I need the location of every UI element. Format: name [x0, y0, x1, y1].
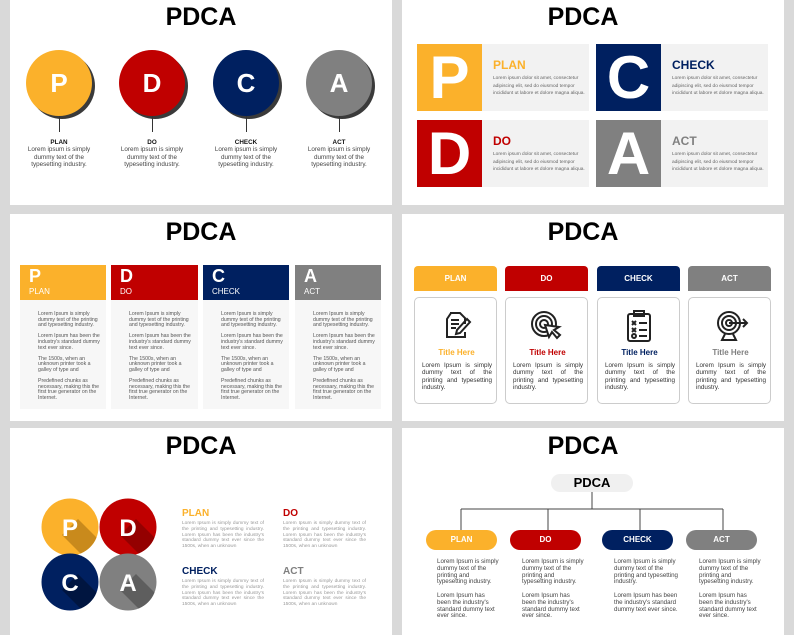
block: ACT: A — [607, 120, 650, 187]
block: CHECK: Lorem ipsum dolor sit amet, consectetur adipiscing elit, sed do eiusmod tempor incididunt ut labore et dolore magna aliqua. — [672, 76, 764, 96]
card: PLAN: PLAN — [445, 274, 466, 283]
text: DO: Lorem Ipsum is simply dummy text of the printing and typesetting industry. Lorem Ipsum has been the industry's standard dummy text ever since the 1500s, when an unknown — [283, 521, 366, 549]
card: CHECK — [597, 266, 680, 404]
text: CHECK: CHECK — [182, 566, 218, 577]
card: ACT: Lorem Ipsum is simply dummy text of the printing and typesetting industry. — [696, 362, 766, 391]
block: ACT: ACT — [672, 134, 697, 148]
node: CHECK — [602, 530, 673, 550]
node: ACT — [686, 530, 757, 550]
column: PLAN: P — [29, 266, 41, 286]
block: CHECK: C — [607, 44, 650, 111]
text: ACT: Lorem Ipsum has been the industry's standard dummy text ever since. — [699, 592, 757, 619]
card: DO: DO — [540, 274, 552, 283]
circle: P — [26, 50, 95, 132]
text: DO — [522, 558, 584, 619]
column: CHECK: CHECK — [212, 287, 240, 296]
column: DO: D — [120, 266, 133, 286]
column: ACT: Lorem Ipsum has been the industry's standard dummy text ever since. — [313, 333, 375, 351]
text: ACT: Lorem Ipsum is simply dummy text of the printing and typesetting industry. — [699, 558, 761, 585]
column: PLAN: The 1500s, when an unknown printer took a galley of type and — [38, 356, 90, 373]
node: ACT: ACT — [713, 535, 730, 544]
circle: D — [119, 50, 188, 132]
text: PLAN: PLAN — [182, 508, 209, 519]
column: CHECK — [203, 265, 289, 409]
text: CHECK: Lorem Ipsum is simply dummy text of the printing and typesetting industry. Lorem Ipsum has been the industry's standard dummy text ever since the 1500s, when an unknown — [182, 579, 264, 607]
panel: slide 5 circle cluster — [10, 428, 392, 635]
circle: P: P — [50, 68, 68, 98]
root node: PDCA — [574, 475, 610, 490]
text: CHECK: CHECK — [235, 139, 257, 146]
column: ACT: Predefined chunks as necessary, making this the first true generator on the Internet. — [313, 378, 374, 401]
text: CHECK — [614, 558, 678, 613]
circle: A: A — [330, 68, 348, 98]
column: DO: The 1500s, when an unknown printer took a galley of type and — [129, 356, 181, 373]
card: PLAN — [414, 266, 497, 404]
text: PLAN — [182, 508, 264, 549]
icon: clipboard checklist — [627, 310, 651, 342]
column: DO: DO — [120, 287, 132, 296]
title: PDCA — [548, 3, 618, 31]
title: PDCA — [548, 432, 618, 460]
block: ACT — [596, 120, 768, 187]
block: DO — [417, 120, 589, 187]
text: ACT: Lorem Ipsum is simply dummy text of the printing and typesetting industry. Lorem Ipsum has been the industry's standard dummy text ever since the 1500s, when an unknown — [283, 579, 366, 607]
block: DO: Lorem ipsum dolor sit amet, consectetur adipiscing elit, sed do eiusmod tempor incididunt ut labore et dolore magna aliqua. — [493, 152, 585, 172]
block: DO: D — [428, 120, 471, 187]
circle: C: C — [237, 68, 255, 98]
text: ACT — [699, 558, 761, 619]
block: PLAN: P — [429, 44, 470, 111]
title: PDCA — [548, 218, 618, 246]
text: ACT: Lorem ipsum is simply dummy text of the typesetting industry. — [308, 146, 370, 168]
column: PLAN: Lorem Ipsum has been the industry's standard dummy text ever since. — [38, 333, 100, 351]
column: PLAN: Predefined chunks as necessary, making this the first true generator on the Internet. — [38, 378, 99, 401]
icon: document with pen — [446, 312, 472, 338]
text: PLAN: Lorem Ipsum has been the industry's standard dummy text ever since. — [437, 592, 495, 619]
text: CHECK — [182, 566, 264, 607]
card: PLAN: Lorem Ipsum is simply dummy text of the printing and typesetting industry. — [422, 362, 492, 391]
node: PLAN: PLAN — [451, 535, 472, 544]
text: PLAN — [437, 558, 499, 619]
icon: target with cursor — [531, 311, 562, 340]
column: ACT: ACT — [304, 287, 320, 296]
card: DO: Lorem Ipsum is simply dummy text of the printing and typesetting industry. — [513, 362, 583, 391]
block: PLAN: PLAN — [493, 58, 526, 72]
column: CHECK: The 1500s, when an unknown printer took a galley of type and — [221, 356, 273, 373]
text: DO — [283, 508, 366, 549]
circle cluster: A — [119, 570, 137, 597]
text: CHECK: Lorem Ipsum has been the industry's standard dummy text ever since. — [614, 592, 678, 613]
node: DO — [510, 530, 581, 550]
column: CHECK: Lorem Ipsum is simply dummy text of the printing and typesetting industry. — [221, 311, 281, 328]
circle: A — [306, 50, 375, 132]
text: ACT: ACT — [333, 139, 345, 146]
panel: slide 1 circles — [10, 0, 392, 205]
column: ACT — [295, 265, 381, 409]
card: CHECK: CHECK — [624, 274, 653, 283]
text: PLAN: Lorem ipsum is simply dummy text of the typesetting industry. — [28, 146, 90, 168]
panel: slide 6 org chart — [402, 428, 784, 635]
card: CHECK: Lorem Ipsum is simply dummy text of the printing and typesetting industry. — [605, 362, 675, 391]
title: PDCA — [166, 432, 236, 460]
text: PLAN: Lorem Ipsum is simply dummy text of the printing and typesetting industry. Lorem Ipsum has been the industry's standard dummy text ever since the 1500s, when an unknown — [182, 521, 264, 549]
text: PLAN: Lorem Ipsum is simply dummy text of the printing and typesetting industry. — [437, 558, 499, 585]
text: CHECK: Lorem ipsum is simply dummy text of the typesetting industry. — [215, 146, 277, 168]
card: DO: Title Here — [529, 348, 566, 357]
card: ACT: Title Here — [712, 348, 749, 357]
card: CHECK: Title Here — [621, 348, 658, 357]
title: PDCA — [166, 218, 236, 246]
block: PLAN — [417, 44, 589, 111]
circle: D: D — [143, 68, 161, 98]
root node — [551, 474, 633, 492]
column: ACT: Lorem Ipsum is simply dummy text of the printing and typesetting industry. — [313, 311, 373, 328]
column: PLAN — [20, 265, 106, 409]
column: CHECK: Lorem Ipsum has been the industry's standard dummy text ever since. — [221, 333, 283, 351]
text: DO: DO — [147, 139, 157, 146]
block: CHECK — [596, 44, 768, 111]
text: DO: Lorem ipsum is simply dummy text of the typesetting industry. — [121, 146, 183, 168]
column: DO: Predefined chunks as necessary, making this the first true generator on the Internet. — [129, 378, 190, 401]
node: DO: DO — [540, 535, 552, 544]
text: ACT — [283, 566, 366, 607]
column: PLAN: PLAN — [29, 287, 50, 296]
block: DO: DO — [493, 134, 511, 148]
column: DO: Lorem Ipsum has been the industry's standard dummy text ever since. — [129, 333, 191, 351]
column: DO: Lorem Ipsum is simply dummy text of the printing and typesetting industry. — [129, 311, 189, 328]
connector lines — [460, 492, 724, 530]
node: PLAN — [426, 530, 497, 550]
circle: C — [213, 50, 282, 132]
column: CHECK: Predefined chunks as necessary, making this the first true generator on the Internet. — [221, 378, 282, 401]
text: DO: Lorem Ipsum has been the industry's standard dummy text ever since. — [522, 592, 580, 619]
icon: target with arrow on stand — [717, 311, 748, 341]
title: PDCA — [166, 3, 236, 31]
panel: slide 3 columns — [10, 214, 392, 421]
block: ACT: Lorem ipsum dolor sit amet, consectetur adipiscing elit, sed do eiusmod tempor incididunt ut labore et dolore magna aliqua. — [672, 152, 764, 172]
card: ACT: ACT — [721, 274, 738, 283]
panel: slide 2 squares — [402, 0, 784, 205]
column: DO — [111, 265, 198, 409]
circle cluster: C — [61, 570, 79, 597]
text: DO: Lorem Ipsum is simply dummy text of the printing and typesetting industry. — [522, 558, 584, 585]
card: DO — [505, 266, 588, 404]
block: PLAN: Lorem ipsum dolor sit amet, consectetur adipiscing elit, sed do eiusmod tempor incididunt ut labore et dolore magna aliqua. — [493, 76, 585, 96]
circle cluster: P — [62, 515, 78, 542]
card: ACT — [688, 266, 771, 404]
text: CHECK: Lorem Ipsum is simply dummy text of the printing and typesetting industry. — [614, 558, 678, 585]
block: CHECK: CHECK — [672, 58, 715, 72]
column: ACT: The 1500s, when an unknown printer took a galley of type and — [313, 356, 365, 373]
card: PLAN: Title Here — [438, 348, 475, 357]
column: CHECK: C — [212, 266, 225, 286]
circle cluster: D — [119, 515, 137, 542]
panel: slide 4 cards with icons — [402, 214, 784, 421]
circle cluster — [42, 498, 156, 610]
node: CHECK: CHECK — [623, 535, 652, 544]
text: ACT: ACT — [283, 566, 304, 577]
column: PLAN: Lorem Ipsum is simply dummy text of the printing and typesetting industry. — [38, 311, 98, 328]
text: PLAN: PLAN — [50, 139, 68, 146]
column: ACT: A — [304, 266, 317, 286]
text: DO: DO — [283, 508, 298, 519]
